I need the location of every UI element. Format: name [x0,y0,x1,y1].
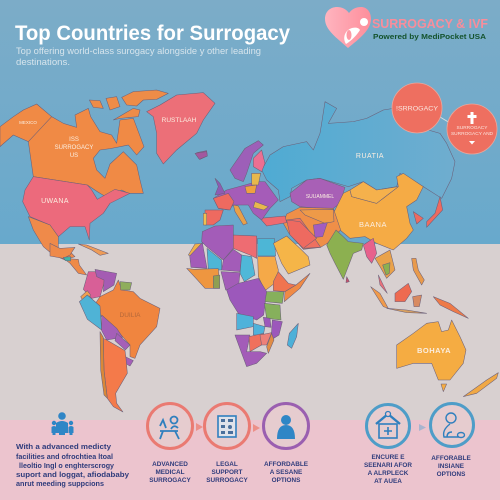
Lower Mozambique [267,333,274,353]
Java [387,308,427,313]
map labels [19,117,451,355]
arrow [253,424,260,432]
West Asia base [283,207,341,249]
Indochina [375,250,395,278]
caption: affordable options [264,461,309,484]
background: ocean band [0,0,500,244]
background: land-tone band [0,244,500,422]
Finland [253,150,265,172]
Ethiopia [273,272,296,292]
Middle East [273,220,317,274]
Brazil [93,280,160,358]
Thailand green core [383,263,390,275]
icon: advanced medical [148,404,192,448]
Botswana [249,333,263,352]
Spain [205,210,223,225]
world map [0,90,498,412]
caption: affordable insurance: INSIANE [438,463,465,470]
Argentina [103,338,127,412]
Ecuador [81,291,91,303]
Japan [427,197,443,227]
subtitle: Top offering world-class surogacy alongside y other leading [16,46,261,57]
Colombia [83,272,105,298]
Malaysia [378,275,387,293]
subtitle: destinations. [16,57,70,68]
Chad [240,255,255,282]
Portugal [203,213,207,225]
text block: intro [16,442,129,488]
caption: ensure: SEENARI AFOR [364,462,412,469]
West Africa [187,268,220,288]
Bolivia [102,315,123,340]
text block: intro: suport and loggat, afiodababy [16,470,129,479]
Korea [413,212,423,224]
callout: surrogacy support [447,104,497,154]
icon: heart with baby [325,7,371,48]
China [333,173,423,250]
caption: advanced medical surrogacy [149,461,192,484]
subtitle [16,46,261,68]
label: Alaska: MEXICO [19,120,37,125]
Turkey [260,216,287,226]
label: Canada: US [70,153,78,159]
Central Asia [300,209,334,223]
Madagascar [287,323,298,348]
New Zealand [463,373,498,397]
Algeria and Morocco [202,225,233,260]
Iceland [197,151,207,159]
Russia [262,102,455,202]
icon: affordable options [264,404,308,448]
Western Sahara [188,243,202,256]
South Africa [235,335,267,367]
Congo [227,278,267,320]
label: Canada: SURROGACY [55,145,93,151]
caption: affordable insurance [431,455,471,478]
caption: affordable options: AFFORDABLE [264,461,309,468]
Tasmania [441,384,447,392]
Iran [287,218,321,248]
footer [16,404,474,488]
caption: legal support [206,461,249,484]
UK [215,178,225,195]
USA [23,177,130,240]
Southern Africa [235,323,298,367]
Sudan [258,257,278,291]
Angola [237,313,253,330]
Australia [397,320,466,380]
Europe [195,141,278,225]
caption: advanced medical surrogacy: SURROGACY [149,477,192,484]
label: Kazakhstan: SUUAMMEL [306,194,334,200]
Romania [253,202,268,210]
Zimbabwe [260,333,272,345]
caption: legal support: LEGAL [216,461,238,468]
Sri Lanka [346,277,349,283]
caption: affordable insurance: AFFORABLE [431,455,471,462]
Saudi Arabia [273,236,310,274]
logo name: SURROGACY & IVF [372,16,488,31]
Iraq [287,220,317,248]
logo [325,7,488,48]
Central America [63,258,87,275]
Myanmar [363,238,377,263]
Mexico south [50,243,75,258]
Kenya [265,292,284,303]
Mozambique [271,320,282,340]
callout: surrogacy [392,83,442,133]
Uruguay [125,357,133,366]
label: Canada: ISS [69,137,79,143]
Borneo [395,283,412,302]
text block: intro: With a advanced medicty [16,442,111,451]
caption: affordable insurance: OPTIONS [437,471,466,478]
Niger [222,249,242,272]
icon: legal support [204,404,250,448]
caption: ensure: AT AUEA [374,478,402,485]
icon: family group [52,412,74,435]
title: Top Countries for Surrogacy [15,22,290,45]
Sulawesi [413,295,422,307]
Cuba [78,244,108,255]
Guinea coast patch [213,275,220,288]
label: Australia: BOHAYA [417,346,451,355]
Mongolia [350,182,398,203]
North America [0,90,215,260]
callout: surrogacy: !SRROGACY [396,106,439,112]
Somalia [284,273,310,302]
caption: legal support: SURROGACY [206,477,249,484]
Greenland [147,93,215,164]
Mauritania [190,243,207,268]
callout: surrogacy support: SURROGACY AND [451,131,494,137]
text block: intro: anrut meeding suppcions [16,479,104,488]
text block: intro: lleoltio Ingl o enghterscrogy [19,461,114,470]
caption: affordable options: A SESANE [270,469,303,476]
Canada and Alaska [0,104,144,197]
Egypt [258,238,276,256]
caption: advanced medical surrogacy: ADVANCED [152,461,188,468]
South America and Caribbean [50,243,160,412]
Libya [233,235,257,258]
Guianas [120,282,132,290]
Italy [233,205,247,225]
arrow [419,424,426,431]
Scandinavia [230,141,263,182]
caption: ensure [364,454,412,485]
connector line [440,117,450,123]
Asia [260,102,455,250]
Malawi [263,317,271,327]
Mexico [28,217,75,260]
Baltics [252,173,261,185]
Peru [79,295,102,330]
Venezuela [95,269,117,292]
caption: advanced medical surrogacy: MEDICAL [155,469,185,476]
South and Southeast Asia, Oceania [327,230,498,397]
caption: affordable options: OPTIONS [272,477,301,484]
Africa [187,225,310,340]
text block: intro: facilities and ofrochtiea ltoal [16,452,113,461]
label: USA: UWANA [41,198,69,205]
Belize teal [63,257,71,261]
Mali [207,248,222,270]
label: Greenland: RUSTLAAH [162,117,197,124]
label: Russia: RUATIA [356,153,384,160]
logo tagline: Powered by MediPocket USA [373,32,487,41]
Iceland [195,152,207,159]
arrow [196,423,203,431]
India [327,230,363,279]
callout: surrogacy support: SURROGACY [457,125,488,131]
Tanzania [264,303,281,320]
Paraguay [115,333,130,350]
Chile [100,332,107,398]
caption: legal support: SUPPORT [212,469,243,476]
France [213,193,234,210]
Europe base [213,182,278,220]
Philippines [412,258,424,285]
Pakistan purple [313,223,327,237]
Kazakhstan [290,178,345,208]
Alaska border [28,117,52,142]
caption: ensure: A ALRPLECK [368,470,409,477]
background: pink footer band [0,420,500,500]
icon: insurance options [430,404,474,446]
Nigeria [221,272,240,290]
label: Brazil: DUILIA [120,312,141,319]
caption: ensure: ENCURE E [371,454,405,461]
Poland [245,185,257,193]
Sumatra [371,287,388,308]
icon: secure home [366,404,410,448]
Arctic islands [89,90,168,120]
Zambia [253,323,265,335]
label: China: BAANA [359,220,387,229]
New Guinea [433,297,468,318]
